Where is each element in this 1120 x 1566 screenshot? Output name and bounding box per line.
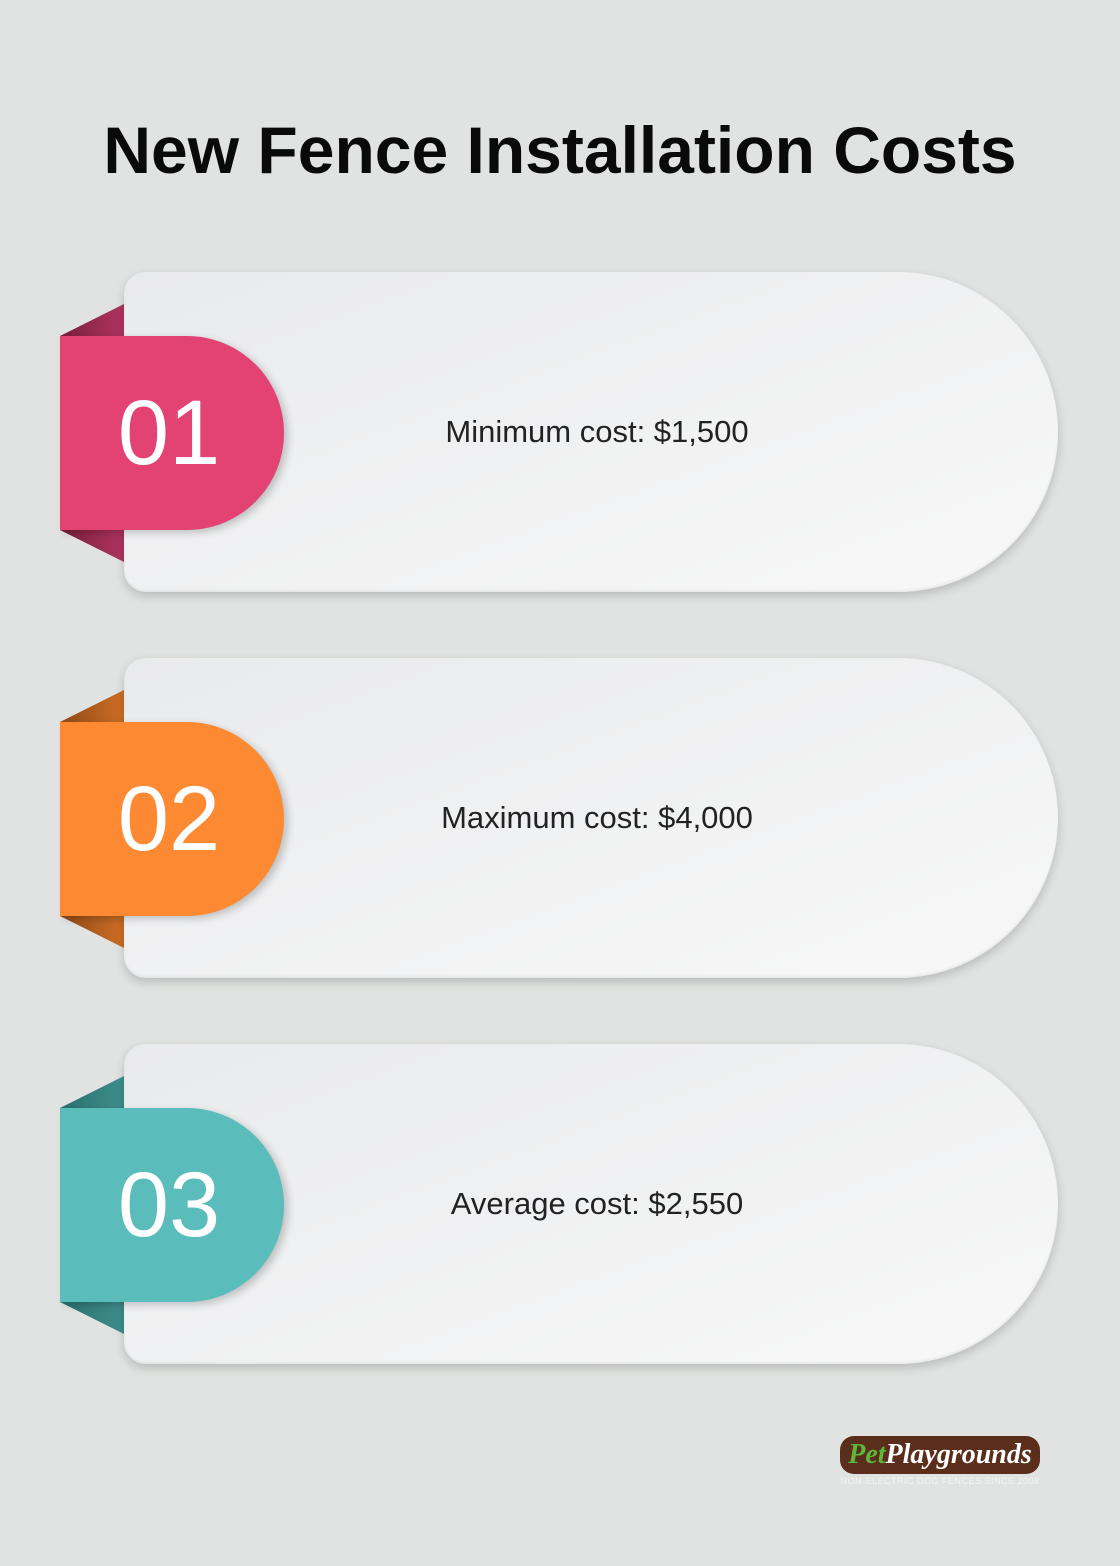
tab: 02 bbox=[60, 722, 284, 916]
card 01 bbox=[124, 272, 1058, 592]
title: New Fence Installation Costs bbox=[103, 113, 1017, 187]
card 02 bbox=[124, 658, 1058, 978]
card 03 bbox=[124, 1044, 1058, 1364]
text: minimum cost: Minimum cost: $1,500 bbox=[445, 414, 749, 449]
logo bbox=[840, 1436, 1040, 1486]
panel: item 02 bbox=[60, 658, 1062, 986]
logo wordmark: PetPlaygrounds bbox=[848, 1439, 1032, 1470]
tab: 01 bbox=[60, 336, 284, 530]
tab: 01: 01 bbox=[118, 382, 220, 484]
text: average cost: Average cost: $2,550 bbox=[451, 1186, 743, 1221]
tab: 02: 02 bbox=[118, 768, 220, 870]
tab: 03: 03 bbox=[118, 1154, 220, 1256]
panel: item 01 bbox=[60, 272, 1062, 600]
logo tagline: NON-ELECTRIC DOG FENCES SINCE 2008 bbox=[840, 1476, 1040, 1486]
fold: item 03 bbox=[60, 1076, 124, 1334]
fold: item 01 bbox=[60, 304, 124, 562]
text: maximum cost: Maximum cost: $4,000 bbox=[441, 800, 753, 835]
panel: item 03 bbox=[60, 1044, 1062, 1372]
fold: item 02 bbox=[60, 690, 124, 948]
tab: 03 bbox=[60, 1108, 284, 1302]
